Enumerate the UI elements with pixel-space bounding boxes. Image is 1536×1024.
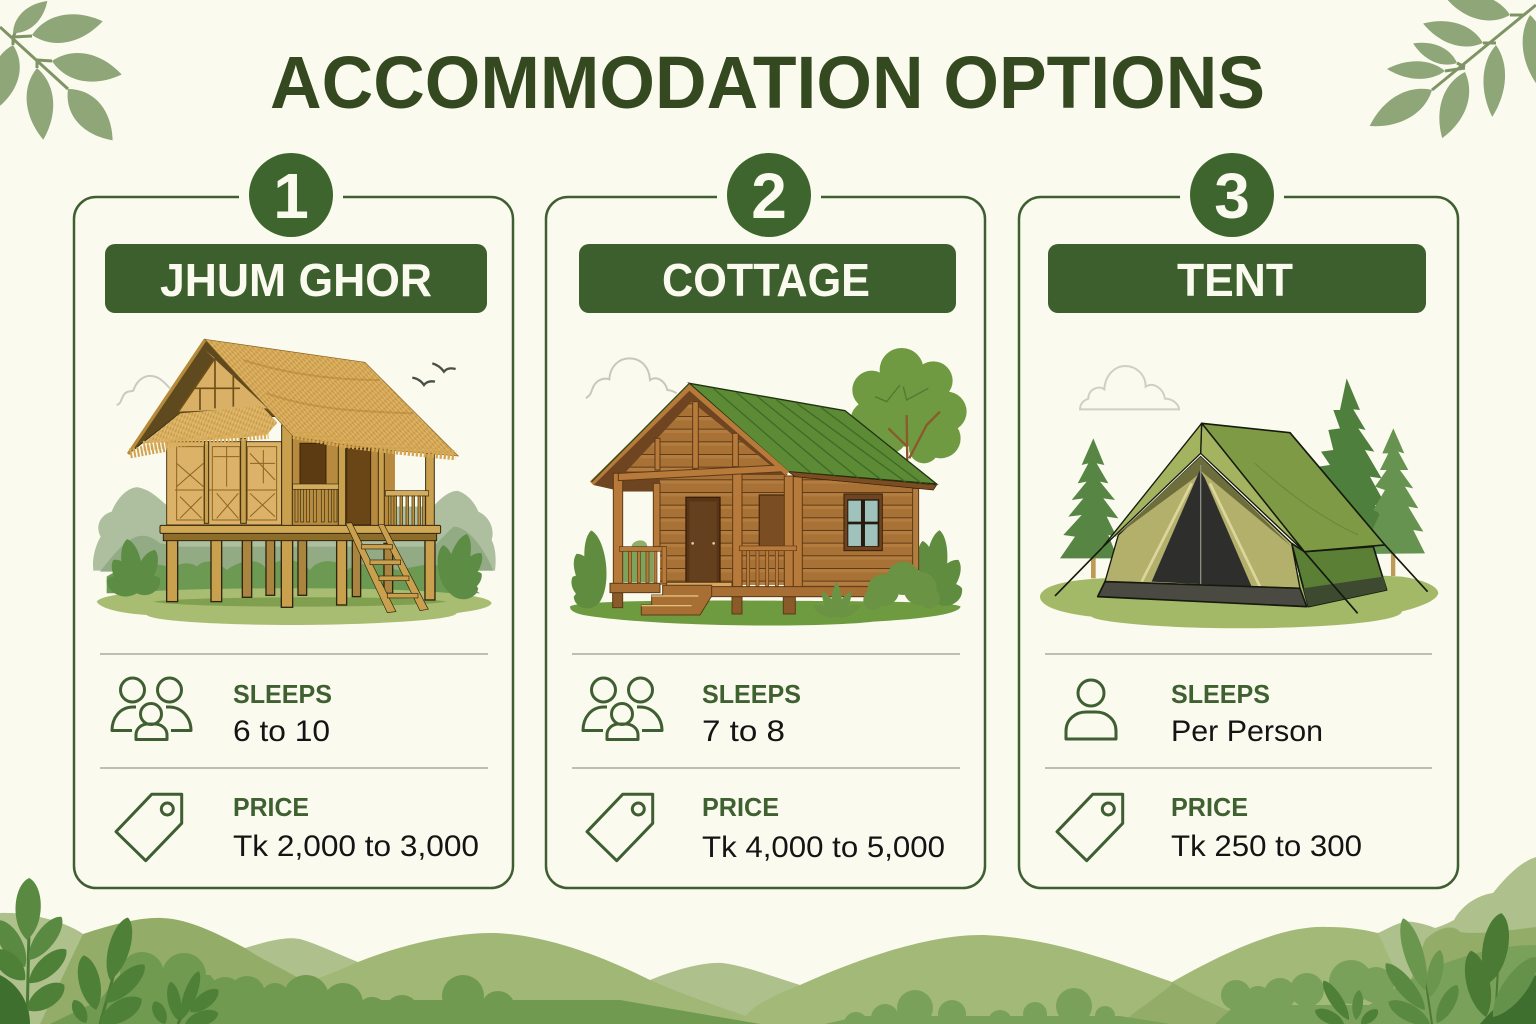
sleeps row bbox=[1066, 679, 1323, 748]
text: price value: Tk 250 to 300 bbox=[1171, 830, 1362, 863]
front thatch roof bbox=[143, 406, 277, 443]
stilts bbox=[167, 530, 435, 607]
hill centre left bbox=[280, 933, 768, 1024]
hill left bbox=[40, 918, 360, 1024]
posts and beam bbox=[613, 465, 802, 588]
ground bbox=[97, 588, 492, 625]
plant left bbox=[103, 537, 164, 602]
decorative leaf branch: top left bbox=[0, 0, 124, 150]
number badge bbox=[727, 153, 811, 237]
card 2: Cottage bbox=[546, 153, 985, 888]
gable posts bbox=[655, 402, 738, 470]
sleeps row bbox=[112, 678, 332, 748]
main thatch roof bbox=[205, 339, 458, 456]
landscape: hills, bushes and plants bbox=[0, 857, 1536, 1024]
door opening bbox=[1152, 470, 1252, 587]
ground bbox=[1040, 575, 1438, 628]
icon: people bbox=[112, 678, 191, 740]
tree left bbox=[1060, 438, 1118, 578]
text: sleeps: SLEEPS bbox=[1171, 679, 1270, 709]
text: sleeps value: 7 to 8 bbox=[702, 715, 785, 748]
number badge: 3 bbox=[1214, 160, 1250, 232]
walls bbox=[167, 442, 282, 525]
bushes left bbox=[50, 952, 760, 1024]
railings bbox=[293, 484, 429, 525]
background bushes bbox=[93, 487, 496, 571]
mid hill bbox=[1120, 982, 1258, 1024]
text: sleeps value: Per Person bbox=[1171, 715, 1323, 748]
railings bbox=[619, 546, 797, 587]
text: sleeps: SLEEPS bbox=[233, 679, 332, 709]
deck and steps bbox=[610, 582, 883, 615]
number badge: 2 bbox=[751, 160, 787, 232]
front fascia bbox=[592, 387, 787, 483]
text: sleeps: SLEEPS bbox=[702, 679, 801, 709]
title: ACCOMMODATION OPTIONS bbox=[270, 41, 1265, 124]
text: sleeps value: 6 to 10 bbox=[233, 715, 330, 748]
tree right bbox=[1362, 428, 1425, 576]
number badge bbox=[249, 153, 333, 237]
heading bar bbox=[105, 244, 487, 313]
front bushes bbox=[811, 562, 940, 621]
green metal roof bbox=[689, 383, 937, 484]
side window bbox=[844, 494, 882, 551]
cloud bbox=[586, 358, 677, 398]
icon: people bbox=[583, 678, 662, 740]
card border bbox=[1019, 197, 1458, 888]
birds bbox=[412, 363, 456, 385]
card 1: Jhum Ghor bbox=[74, 153, 513, 888]
heading bar bbox=[1048, 244, 1426, 313]
hill centre right bbox=[740, 935, 1258, 1024]
tree bbox=[851, 348, 967, 463]
cloud bbox=[117, 376, 170, 405]
price row bbox=[116, 792, 479, 863]
text: price: PRICE bbox=[702, 792, 779, 822]
lower foliage bbox=[100, 527, 493, 572]
number badge bbox=[1190, 153, 1274, 237]
right mid layer bbox=[1395, 927, 1536, 1024]
illustration: canvas tent bbox=[1040, 366, 1438, 628]
price row bbox=[1057, 792, 1362, 863]
heading bar bbox=[579, 244, 956, 313]
ladder bbox=[346, 523, 428, 613]
porch window bbox=[759, 495, 785, 547]
sleeps row bbox=[583, 678, 801, 748]
plants bottom right bbox=[1312, 911, 1536, 1024]
side wall bbox=[1292, 543, 1387, 607]
icon: price tag bbox=[116, 794, 182, 861]
text: price value: Tk 4,000 to 5,000 bbox=[702, 831, 945, 864]
plants bottom left bbox=[0, 878, 223, 1024]
plant right bbox=[435, 531, 489, 602]
bamboo wall posts bbox=[204, 425, 434, 528]
icon: person bbox=[1066, 680, 1116, 739]
roof bbox=[1202, 423, 1385, 552]
card 3: Tent bbox=[1019, 153, 1458, 888]
bushes bbox=[565, 529, 967, 611]
gable bbox=[128, 339, 280, 454]
tree back right bbox=[1308, 378, 1388, 553]
icon: price tag bbox=[587, 794, 653, 861]
card border bbox=[74, 197, 513, 888]
platform beams bbox=[163, 533, 437, 541]
bushes right bbox=[825, 945, 1536, 1024]
heading bar: JHUM GHOR bbox=[160, 254, 432, 306]
door bbox=[686, 497, 720, 582]
card border bbox=[546, 197, 985, 888]
price row bbox=[587, 792, 945, 864]
heading bar: COTTAGE bbox=[662, 254, 870, 306]
guy ropes bbox=[1055, 545, 1428, 613]
illustration: wooden cottage bbox=[565, 348, 967, 626]
decorative leaf branch: top right bbox=[1363, 0, 1536, 142]
text: price: PRICE bbox=[233, 792, 309, 822]
gable and front wall bbox=[626, 402, 778, 472]
icon: price tag bbox=[1057, 794, 1123, 861]
heading bar: TENT bbox=[1177, 254, 1293, 306]
ground bbox=[570, 601, 961, 626]
gable underside bbox=[593, 390, 787, 492]
text: price value: Tk 2,000 to 3,000 bbox=[233, 830, 479, 863]
back hills bbox=[0, 857, 1536, 1024]
window and door bbox=[300, 443, 326, 485]
cloud bbox=[1080, 366, 1179, 409]
side wall bbox=[795, 477, 918, 597]
text: price: PRICE bbox=[1171, 792, 1248, 822]
front canvas bbox=[1105, 457, 1300, 588]
hill right bbox=[1100, 927, 1420, 1024]
base band bbox=[1098, 582, 1307, 607]
wall panels bbox=[175, 447, 277, 520]
illustration: stilt bamboo hut bbox=[93, 339, 496, 625]
number badge: 1 bbox=[273, 160, 309, 232]
